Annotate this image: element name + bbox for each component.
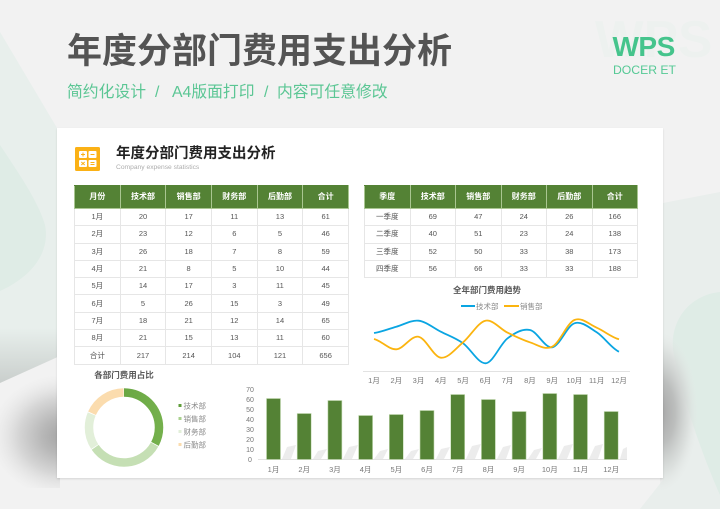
table: quarterly expenses: 50 — [474, 247, 482, 256]
table: monthly expenses: 3 — [232, 281, 236, 290]
donut title: 各部门费用占比 — [94, 370, 154, 380]
subtitle — [67, 83, 388, 101]
table: quarterly expenses: 三季度 — [376, 247, 398, 256]
table: monthly expenses: 45 — [321, 281, 330, 290]
line chart x axis: 7月 — [502, 376, 513, 385]
line chart legend: 销售部 — [520, 301, 543, 311]
table: monthly expenses: 13 — [276, 212, 284, 221]
table: monthly expenses: 15 — [230, 299, 238, 308]
bar chart x axis labels: 12月 — [603, 465, 619, 474]
line chart x axis: 9月 — [546, 376, 558, 385]
table: quarterly expenses: 合计 — [607, 192, 623, 201]
table: quarterly expenses: 26 — [565, 212, 573, 221]
table: quarterly expenses: 四季度 — [376, 264, 398, 273]
table: monthly expenses: 26 — [139, 247, 147, 256]
bar chart x axis labels: 6月 — [421, 465, 433, 474]
table: quarterly expenses: 47 — [474, 212, 482, 221]
table: monthly expenses: 49 — [321, 299, 330, 308]
table: monthly expenses: 44 — [321, 264, 330, 273]
line series: 销售部 — [374, 319, 619, 358]
line chart x axis: 12月 — [611, 376, 627, 385]
table: quarterly expenses: 56 — [429, 264, 437, 273]
table: monthly expenses: 11 — [276, 281, 284, 290]
bar chart y axis: 50 — [246, 407, 254, 414]
table: monthly expenses: 20 — [139, 212, 147, 221]
table: monthly expenses: 121 — [274, 351, 286, 360]
table: monthly expenses: 3月 — [91, 247, 103, 256]
table: monthly expenses: 21 — [139, 333, 147, 342]
table: monthly expenses: 65 — [321, 316, 330, 325]
bar chart y axis: 40 — [246, 417, 254, 424]
bar chart y axis: 20 — [246, 437, 254, 444]
donut legend: 技术部 — [184, 400, 206, 410]
line chart x axis: 2月 — [390, 376, 402, 385]
subtitle: / — [155, 84, 159, 101]
bar chart y axis: 0 — [248, 457, 252, 464]
bar chart: monthly totals — [266, 394, 618, 460]
table: quarterly expenses: 52 — [429, 247, 437, 256]
line chart x axis: 8月 — [524, 376, 536, 385]
table: monthly expenses: 4月 — [91, 264, 103, 273]
bar chart baseline — [258, 458, 627, 460]
line chart x axis: 5月 — [457, 376, 469, 385]
table: quarterly expenses: 销售部 — [466, 192, 490, 201]
subtitle: A4版面打印 — [172, 84, 255, 101]
logo subtitle: DOCER ET: DOCER ET — [613, 63, 676, 77]
subtitle: 内容可任意修改 — [277, 84, 388, 101]
table: quarterly expenses — [364, 185, 638, 278]
table: monthly expenses: 17 — [184, 281, 193, 290]
table: quarterly expenses: 季度 — [379, 192, 395, 201]
table: quarterly expenses: 33 — [565, 264, 573, 273]
table: monthly expenses: 11 — [230, 212, 238, 221]
table: monthly expenses: 12 — [184, 229, 193, 238]
table: monthly expenses: 财务部 — [222, 192, 246, 201]
line chart legend: 技术部 — [476, 301, 499, 311]
table: quarterly expenses: 24 — [565, 229, 573, 238]
table: monthly expenses: 技术部 — [131, 192, 155, 201]
table: monthly expenses: 656 — [319, 351, 332, 360]
table: monthly expenses: 合计 — [90, 351, 105, 360]
line chart x axis: 6月 — [480, 376, 491, 385]
table: monthly expenses: 14 — [139, 281, 147, 290]
table: monthly expenses: 23 — [139, 229, 147, 238]
table: monthly expenses: 合计 — [318, 192, 334, 201]
table: monthly expenses: 3 — [278, 299, 282, 308]
panel: report sheet — [57, 128, 663, 478]
table: monthly expenses: 26 — [184, 299, 193, 308]
line chart legend — [461, 301, 543, 311]
table: monthly expenses: 10 — [276, 264, 284, 273]
table: monthly expenses: 61 — [321, 212, 330, 221]
bar chart x axis labels: 2月 — [298, 465, 310, 474]
line chart x axis: 4月 — [435, 376, 447, 385]
sheet title: 年度分部门费用支出分析 — [116, 146, 276, 162]
bar chart y axis: 30 — [246, 427, 254, 434]
bar chart x axis labels: 10月 — [542, 465, 558, 474]
table: monthly expenses: 8 — [187, 264, 191, 273]
table: monthly expenses: 59 — [321, 247, 330, 256]
line chart x axis — [363, 372, 630, 385]
table: monthly expenses: 5 — [232, 264, 236, 273]
donut legend: 后勤部 — [184, 440, 206, 450]
table: monthly expenses: 217 — [137, 351, 149, 360]
table: monthly expenses: 销售部 — [177, 192, 201, 201]
table: quarterly expenses: 173 — [608, 247, 621, 256]
table: monthly expenses: 17 — [184, 212, 193, 221]
logo: WPS: WPS — [612, 30, 675, 62]
bar chart y axis: 60 — [246, 397, 254, 404]
table: monthly expenses: 14 — [276, 316, 284, 325]
bar chart x axis labels: 1月 — [268, 465, 279, 474]
table: quarterly expenses: 51 — [474, 229, 482, 238]
bar chart x axis labels: 11月 — [573, 465, 588, 474]
table: quarterly expenses: 23 — [520, 229, 528, 238]
table: quarterly expenses: 69 — [429, 212, 437, 221]
table: monthly expenses: 5月 — [91, 281, 103, 290]
table: monthly expenses: 46 — [321, 229, 330, 238]
table: quarterly expenses: 一季度 — [376, 212, 398, 221]
donut legend: 财务部 — [184, 426, 206, 436]
table: monthly expenses: 12 — [230, 316, 238, 325]
line chart x axis: 10月 — [566, 376, 582, 385]
table: monthly expenses: 11 — [276, 333, 284, 342]
table: monthly expenses: 13 — [230, 333, 238, 342]
table: quarterly expenses: 二季度 — [376, 229, 398, 238]
table: monthly expenses: 15 — [184, 333, 193, 342]
table: quarterly expenses: 33 — [520, 247, 528, 256]
table: quarterly expenses: 技术部 — [421, 192, 445, 201]
table: monthly expenses: 6月 — [91, 299, 103, 308]
table: monthly expenses: 21 — [139, 264, 147, 273]
sheet subtitle: Company expense statistics — [116, 164, 199, 171]
bar chart x axis labels: 9月 — [513, 465, 525, 474]
table: monthly expenses: 18 — [139, 316, 147, 325]
bar chart y axis: 70 — [246, 387, 254, 394]
table: monthly expenses: 8 — [278, 247, 282, 256]
table: monthly expenses: 后勤部 — [268, 192, 292, 201]
table: monthly expenses: 21 — [184, 316, 193, 325]
table: monthly expenses: 60 — [321, 333, 330, 342]
table: monthly expenses: 214 — [182, 351, 195, 360]
line chart x axis: 1月 — [368, 376, 380, 385]
line chart x axis: 11月 — [589, 376, 604, 385]
table: monthly expenses: 104 — [228, 351, 241, 360]
bar chart x axis labels: 3月 — [329, 465, 341, 474]
table: monthly expenses: 18 — [184, 247, 193, 256]
bar shadows — [282, 444, 627, 459]
table: monthly expenses: 5 — [141, 299, 145, 308]
main title: 年度分部门费用支出分析 — [67, 32, 452, 71]
subtitle: 简约化设计 — [67, 84, 146, 101]
table: monthly expenses: 1月 — [91, 212, 103, 221]
table: monthly expenses: 8月 — [91, 333, 103, 342]
table: quarterly expenses: 33 — [520, 264, 528, 273]
table: monthly expenses: 6 — [232, 229, 236, 238]
donut legend: 销售部 — [184, 414, 206, 424]
bar chart x axis labels — [268, 465, 619, 474]
table: quarterly expenses: 188 — [608, 264, 621, 273]
bar chart x axis labels: 7月 — [452, 465, 464, 474]
table: monthly expenses: 月份 — [89, 192, 105, 201]
donut chart — [89, 392, 159, 462]
table: monthly expenses: 2月 — [91, 229, 103, 238]
table: quarterly expenses: 24 — [520, 212, 528, 221]
table: quarterly expenses: 40 — [429, 229, 437, 238]
line chart title: 全年部门费用趋势 — [453, 285, 521, 295]
table: monthly expenses — [74, 185, 349, 365]
bar chart y axis: 10 — [246, 447, 254, 454]
table: quarterly expenses: 38 — [565, 247, 573, 256]
table: quarterly expenses: 166 — [608, 212, 621, 221]
bar chart y axis — [246, 387, 254, 464]
line chart x axis: 3月 — [413, 376, 424, 385]
table: quarterly expenses: 138 — [608, 229, 621, 238]
icon: calculator — [75, 147, 100, 171]
table: monthly expenses: 7 — [232, 247, 236, 256]
bar chart x axis labels: 4月 — [360, 465, 371, 474]
table: monthly expenses: 5 — [278, 229, 282, 238]
line series: 技术部 — [374, 321, 619, 363]
bar chart x axis labels: 5月 — [390, 465, 402, 474]
table: quarterly expenses: 财务部 — [512, 192, 536, 201]
table: quarterly expenses: 后勤部 — [557, 192, 581, 201]
bar chart x axis labels: 8月 — [483, 465, 494, 474]
donut legend — [178, 400, 206, 450]
subtitle: / — [264, 84, 268, 101]
watermark: WPS: WPS — [595, 10, 712, 68]
table: monthly expenses: 7月 — [91, 316, 103, 325]
table: quarterly expenses: 66 — [474, 264, 482, 273]
